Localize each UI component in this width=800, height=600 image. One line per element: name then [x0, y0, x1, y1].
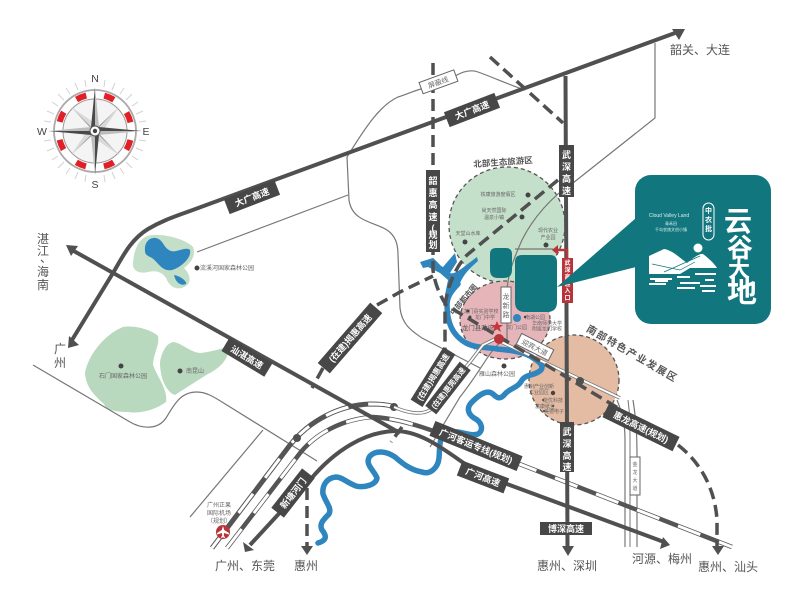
central zone points: 华南师范大学	[532, 320, 562, 327]
road label: Guanghe passenger rail: 广河客运专线(规划)	[438, 426, 514, 466]
road label: Yingbin avenue: 迎宾大道	[520, 337, 549, 358]
south zone points	[524, 383, 564, 415]
central zone points: 南湖公园	[525, 314, 545, 321]
airport: 国际机场	[207, 509, 231, 517]
railway: Guanghe passenger line	[212, 338, 732, 548]
forest park point	[479, 364, 515, 378]
north zone points: 铁康旅游度假区	[480, 191, 516, 198]
red entrance sign	[552, 245, 573, 303]
park labels: 流溪河国家森林公园	[200, 264, 254, 272]
road label: Wushen upper: 速	[562, 185, 571, 196]
city labels: 湛	[37, 232, 49, 246]
road label: Wushen upper	[559, 145, 574, 197]
city labels	[37, 42, 758, 574]
road label: Shaohui planned	[426, 170, 440, 252]
road label: Wushen upper: 武	[562, 150, 571, 160]
road label: Jinlong avenue: 大	[632, 477, 638, 484]
panel: central urban zone	[460, 281, 550, 359]
road label: Wushen lower: 武	[562, 427, 572, 437]
road label: Shanzhan: 汕湛高速	[229, 343, 265, 371]
panel: Cloud Valley Land logo: 中	[705, 206, 712, 215]
central zone label: 中部都市圈	[447, 282, 479, 317]
north zone points: 天堂山水库	[455, 230, 481, 237]
road label: Jinlong avenue: 金	[632, 461, 638, 468]
central zone points: 附属龙门学校	[532, 326, 562, 332]
thin roads	[33, 43, 655, 547]
road label: Xintang Hemen: 新塘河门	[278, 475, 308, 511]
panel: Cloud Valley Land logo: 批	[705, 224, 712, 233]
road label: Shaohui planned: 规	[428, 229, 438, 240]
panel: north eco-tourism zone	[449, 155, 565, 283]
north zone points: 温泉小镇	[484, 214, 504, 221]
panel: Nankun mountain	[160, 342, 228, 395]
panel: Cloud Valley Land logo	[635, 175, 771, 324]
north zone points: 产业园	[540, 234, 556, 241]
city labels: 河源、梅州	[632, 551, 692, 566]
logo title: 大	[728, 257, 750, 282]
central zone points: 龙门县实验学校	[463, 308, 499, 315]
compass letters: S	[91, 179, 99, 191]
city labels: 海	[37, 264, 49, 279]
red entrance sign: 入	[564, 288, 571, 295]
road label: under construction A: (在建)揭惠高速	[326, 312, 374, 364]
south zone points: 惠州产业创新	[524, 383, 554, 390]
road label: Shaohui planned: 速	[428, 211, 438, 222]
road label: Wushen lower: 速	[562, 461, 572, 472]
road label: Shanzhan	[221, 337, 273, 377]
road label: Guanghe expressway	[457, 461, 509, 493]
road label: Shaohui planned: 划	[428, 239, 438, 250]
road label: Wushen lower	[560, 422, 574, 472]
red entrance sign: 高	[564, 273, 571, 281]
compass red segments	[51, 87, 139, 175]
road label: Shaohui planned: 惠	[428, 187, 438, 198]
south zone points: 富康纸业	[535, 403, 555, 410]
heading: south zone: 南部特色产业发展区	[584, 322, 680, 385]
pond in central zone	[513, 314, 521, 322]
road label: Guanghe passenger rail	[429, 421, 523, 471]
city labels: 广	[54, 342, 66, 356]
road label: Xintang Hemen	[271, 468, 315, 518]
airport: 广州正果	[207, 501, 231, 509]
road label: under construction B	[411, 347, 455, 407]
road label: Jinlong avenue: 道	[632, 485, 638, 492]
road label: under construction B: (在建)揭惠高速	[415, 352, 451, 402]
red entrance sign: 武	[564, 260, 571, 267]
highway: Guanghe with arrows	[243, 431, 670, 552]
highway: Wushen with arrow	[562, 76, 574, 556]
central zone points: 龙门公园	[507, 324, 527, 331]
planned dashed expressways	[301, 57, 724, 555]
road label: Wushen lower: 高	[562, 450, 572, 461]
road label: Guanghe expressway: 广河高速	[464, 465, 502, 489]
central zone points	[462, 308, 562, 344]
road label: Pingbi line: 屏蔽线	[427, 75, 450, 90]
north zone points: 尚天然国际	[481, 207, 507, 214]
rail station knots	[293, 434, 301, 442]
north zone points: 现代农业	[538, 227, 558, 234]
road label: Jinlong avenue	[630, 457, 640, 495]
road label: Longxin road: 路	[502, 310, 510, 319]
logo small text: 青禾田	[665, 220, 677, 226]
north zone points	[455, 191, 558, 248]
logo seal	[703, 203, 714, 240]
road label: Wushen lower: 深	[562, 439, 572, 449]
road label: Daguang lower	[224, 180, 280, 214]
city labels: 惠州、深圳	[537, 559, 597, 573]
logo small text: 千岛农旅文创小镇	[655, 226, 687, 232]
road label: Daguang upper: 大广高速	[453, 98, 491, 122]
panel: Cloud Valley Land logo: 农	[705, 215, 712, 224]
logo mountains	[649, 244, 717, 292]
logo title: 谷	[727, 233, 753, 263]
compass ring	[54, 90, 136, 172]
road label: Pingbi line	[419, 70, 458, 94]
red entrance sign: 速	[564, 280, 571, 288]
teal project parcel large	[515, 255, 557, 312]
icon: government star	[491, 321, 503, 332]
compass letters: W	[37, 126, 47, 138]
road label: Wushen upper: 深	[562, 162, 571, 172]
compass letters: E	[142, 126, 150, 138]
south zone points: 美德电子	[544, 408, 564, 415]
river	[318, 253, 542, 543]
road label: Longxin road: 新	[502, 301, 510, 310]
park labels: 石门国家森林公园	[99, 372, 147, 380]
road label: under construction C: (在建)惠莞高速	[429, 365, 468, 411]
panel: Shimen forest park	[85, 327, 166, 413]
icon: plane	[216, 525, 230, 539]
panel: south industrial zone	[529, 322, 680, 425]
red entrance sign: 口	[564, 295, 571, 302]
logo title: 云	[724, 206, 752, 237]
red entrance sign: 深	[564, 266, 571, 274]
compass letters: N	[91, 73, 99, 85]
road label: Shaohui planned: 韶	[428, 175, 438, 186]
south zone points: 能优科技	[543, 397, 563, 404]
road label: Huilong planned: 惠龙高速(规划)	[612, 409, 670, 445]
central zone points: 龙门中学	[475, 314, 495, 321]
highway: Daguang with arrows	[68, 29, 685, 348]
airport	[207, 501, 231, 539]
compass	[37, 73, 150, 191]
city labels: 州	[54, 356, 66, 370]
city labels: 惠州、汕头	[698, 560, 758, 574]
road label: Boshen	[540, 522, 592, 535]
highway: Shanzhan with arrow	[66, 245, 400, 433]
south zone points: 工业园区	[529, 389, 549, 396]
city labels: 江	[37, 244, 49, 258]
heading: north zone: 北部生态旅游区	[473, 155, 534, 169]
logo title: 地	[727, 276, 757, 309]
central zone points: 龙门县政府	[462, 323, 495, 332]
lake	[420, 253, 478, 297]
airport: （规划）	[207, 517, 231, 525]
icon: red location dot	[494, 334, 504, 344]
teal project parcel small	[490, 248, 512, 278]
road label: under construction A	[318, 303, 382, 373]
forest park point: 雁山森林公园	[479, 370, 515, 378]
panel: Liuxi forest park with lake	[133, 235, 194, 288]
city labels: 惠州	[294, 559, 318, 573]
road label: Daguang lower: 大广高速	[233, 185, 271, 209]
logo English name: Cloud Valley Land	[649, 213, 689, 219]
road label: Jinlong avenue: 龙	[632, 469, 638, 476]
compass ticks	[44, 80, 146, 182]
park labels	[99, 264, 254, 380]
city labels: 、	[40, 251, 52, 265]
road label: Shaohui planned: 高	[428, 199, 438, 210]
road label: Wushen upper: 高	[562, 173, 571, 184]
road label: Daguang upper	[444, 93, 500, 127]
road label: Longxin road	[501, 287, 511, 323]
pointer from parcel to logo	[557, 218, 636, 287]
park labels: 南昆山	[186, 367, 204, 375]
road label: Yingbin avenue	[516, 333, 554, 361]
road label: Longxin road: 龙	[502, 292, 510, 301]
compass star	[48, 87, 142, 175]
road label: Huilong planned	[602, 403, 680, 451]
city labels: 南	[37, 277, 49, 292]
city labels: 广州、东莞	[215, 559, 275, 573]
road label: Shaohui planned: (	[432, 223, 434, 233]
city labels: 韶关、大连	[670, 42, 730, 57]
road label: Boshen: 博深高速	[548, 523, 584, 534]
